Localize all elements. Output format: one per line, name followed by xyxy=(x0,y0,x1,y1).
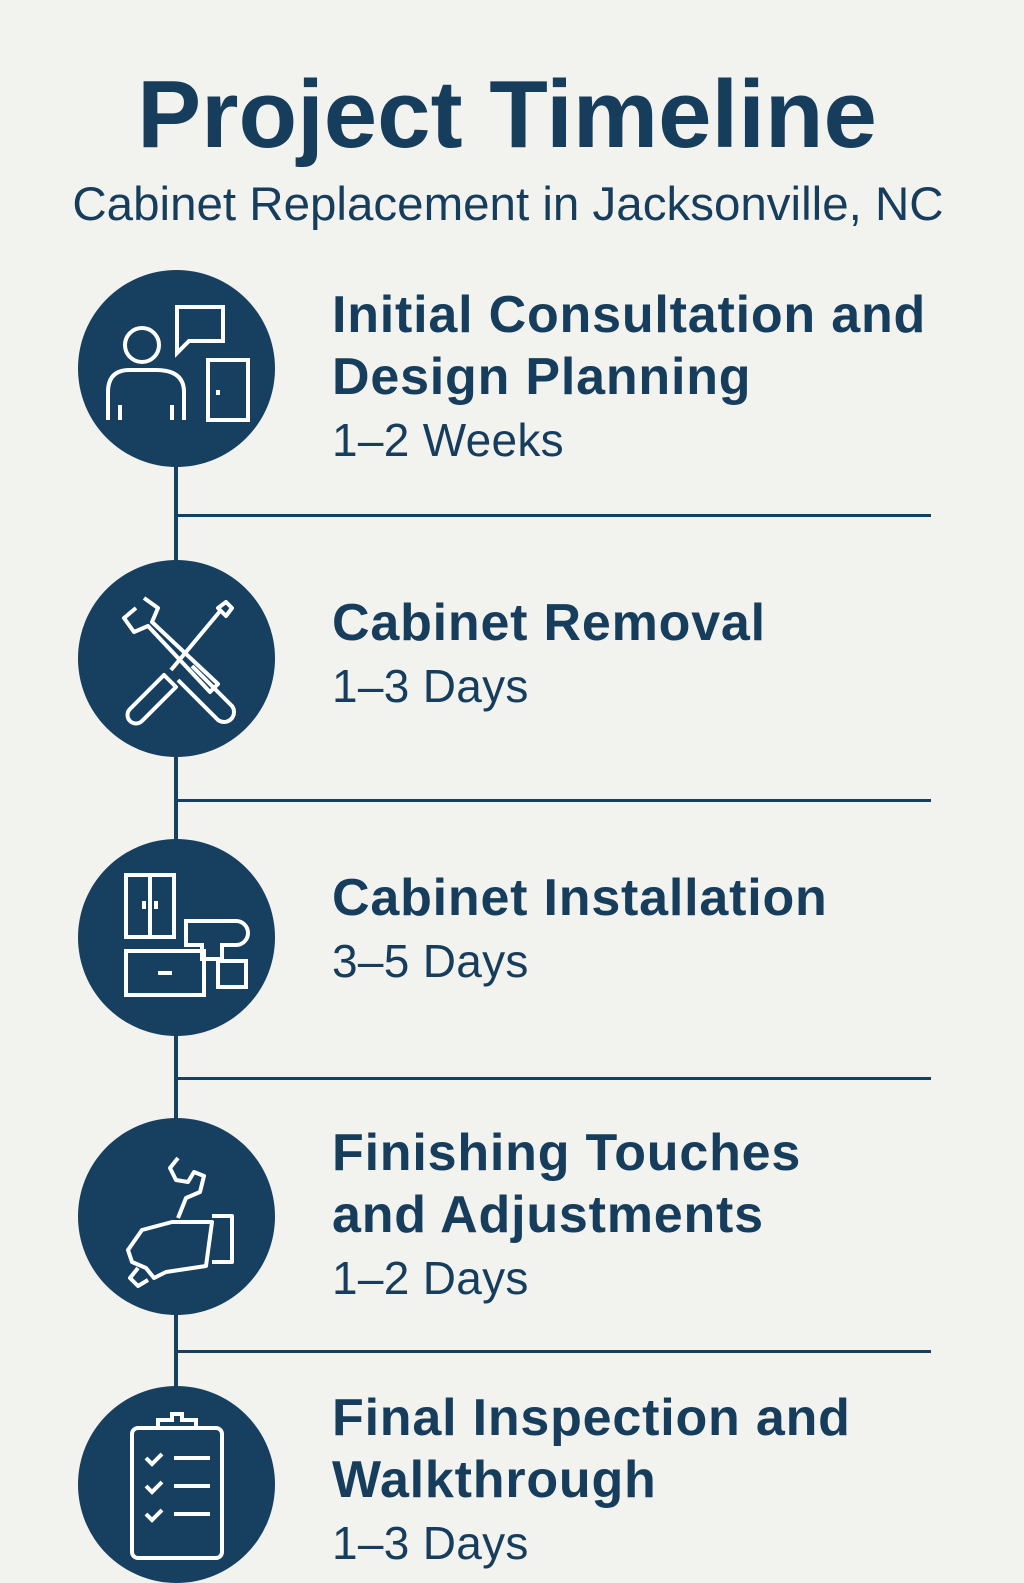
subtitle: Cabinet Replacement in Jacksonville, NC xyxy=(72,178,944,231)
icon: consultation xyxy=(78,270,275,467)
text: and Adjustments xyxy=(332,1186,764,1244)
text xyxy=(332,1124,801,1304)
text: 1–2 Days xyxy=(332,1252,529,1304)
text: 1–3 Days xyxy=(332,660,529,712)
text: Final Inspection and xyxy=(332,1389,851,1447)
icon: hand with wrench xyxy=(78,1118,275,1315)
text xyxy=(332,286,926,466)
text: Initial Consultation and xyxy=(332,286,926,344)
text: Walkthrough xyxy=(332,1451,657,1509)
text xyxy=(332,1389,851,1569)
step 4: finishing xyxy=(78,1118,801,1315)
timeline line xyxy=(174,369,178,1536)
text: 1–2 Weeks xyxy=(332,414,564,466)
step 5: final inspection xyxy=(78,1386,851,1583)
text: Cabinet Installation xyxy=(332,869,828,927)
text xyxy=(332,594,766,712)
icon: clipboard xyxy=(78,1386,275,1583)
step 1: consultation xyxy=(78,270,926,467)
text: Design Planning xyxy=(332,348,751,406)
text: Cabinet Removal xyxy=(332,594,766,652)
step 3: installation xyxy=(78,839,828,1036)
text: 3–5 Days xyxy=(332,935,529,987)
text: Finishing Touches xyxy=(332,1124,801,1182)
icon: wrench and screwdriver xyxy=(78,560,275,757)
step 2: removal xyxy=(78,560,766,757)
text: 1–3 Days xyxy=(332,1517,529,1569)
text xyxy=(332,869,828,987)
title: Project Timeline xyxy=(137,61,877,168)
icon: cabinets and drill xyxy=(78,839,275,1036)
